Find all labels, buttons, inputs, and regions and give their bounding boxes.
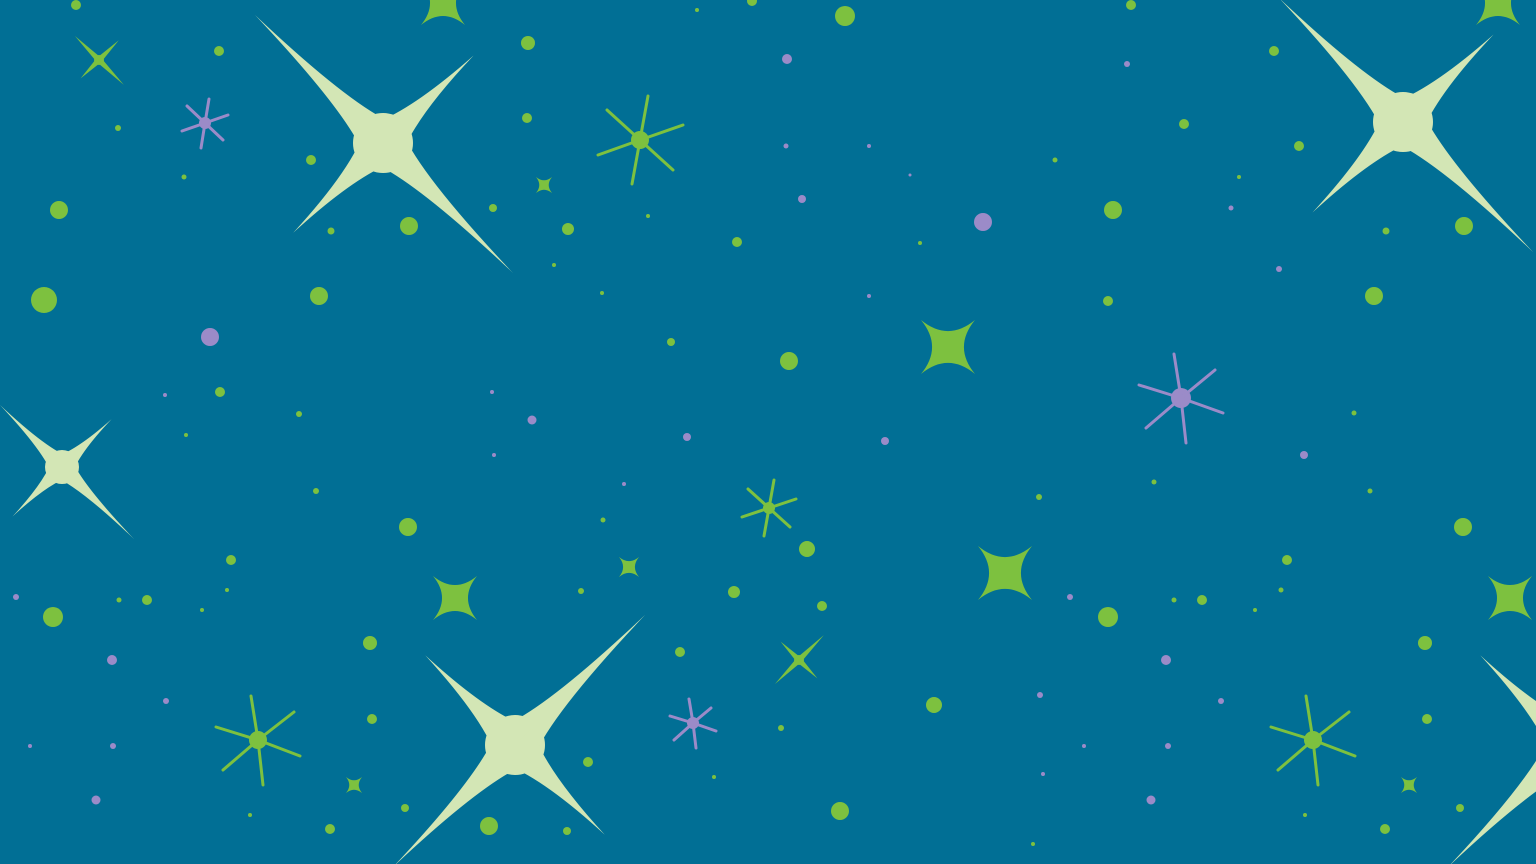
pale star 5 partial xyxy=(1431,638,1536,864)
sputnik stars xyxy=(182,96,1355,785)
purple dots xyxy=(13,54,1308,804)
thin green sparkles xyxy=(73,34,826,686)
pale star 4 xyxy=(0,396,143,548)
big pale star 2 xyxy=(1262,0,1536,269)
big pale star 1 xyxy=(238,0,530,290)
big pale star 3 xyxy=(376,598,662,864)
green concave stars xyxy=(346,0,1532,793)
